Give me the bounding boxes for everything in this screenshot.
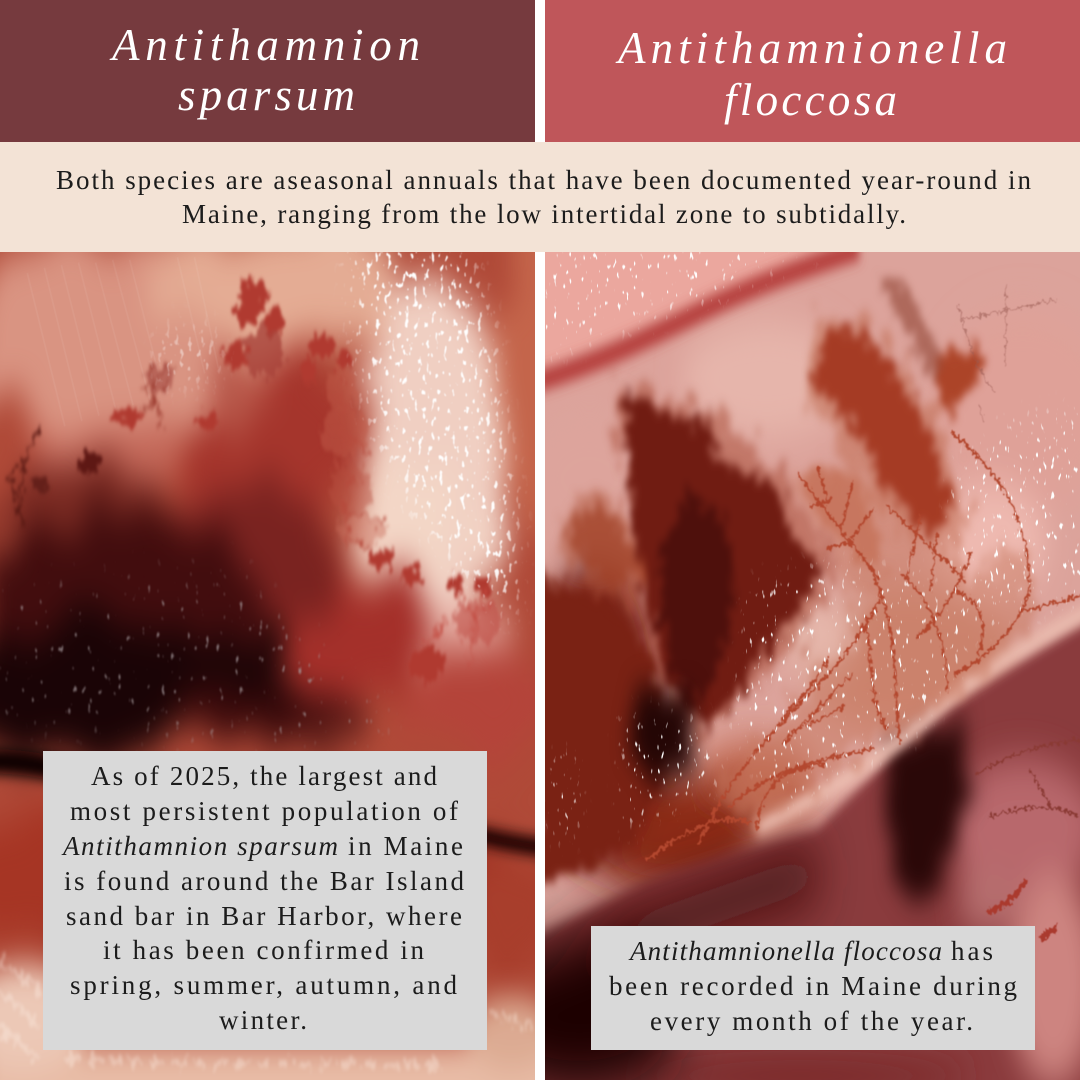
callout text: largest Maine population at Bar Island [61,761,464,1035]
pink fingertip and crease [531,231,866,376]
text: both species are aseasonal annuals: Maine, ranging from the low intertidal zone to subtidally. [182,199,906,229]
seaweed halos [555,321,1033,822]
wet sparkle highlights [535,236,1080,833]
heading: Antithamnion sparsum [109,20,420,120]
text: both species are aseasonal annuals [56,165,1032,229]
panel: left species heading [0,0,535,142]
callout text: largest Maine population at Bar Island: in Maine [348,831,463,861]
callout: left population note [43,751,487,1050]
callout text: recorded every month: every month of the year. [650,1006,973,1036]
panel: right species heading [545,0,1080,142]
callout text: recorded every month [609,936,1017,1036]
sparkling ridge highlights [157,220,515,616]
peach finger at the bottom [0,965,560,1080]
callout text: largest Maine population at Bar Island: sand bar in Bar Harbor, where [66,901,462,931]
callout text: largest Maine population at Bar Island: most persistent population of [70,796,458,826]
lower ridge highlights [0,962,535,1065]
callout text: largest Maine population at Bar Island: Antithamnion sparsum [61,831,338,861]
heading: Antithamnion sparsum: sparsum [178,70,355,120]
water droplets over dark mass [0,569,403,748]
seaweed fronds [535,278,982,886]
callout text: largest Maine population at Bar Island: winter. [219,1005,307,1035]
callout text: recorded every month: Antithamnionella floccosa [628,936,942,966]
dark patch on the lower finger [886,722,968,902]
fingerprint ridges [27,257,218,426]
callout text: recorded every month: been recorded in Maine during [609,971,1017,1001]
heading: Antithamnionella floccosa: Antithamnionella [615,23,1007,73]
heading: Antithamnionella floccosa: floccosa [724,75,897,125]
photo: Antithamnion sparsum on a fingertip [0,252,535,1080]
callout text: largest Maine population at Bar Island: spring, summer, autumn, and [70,970,458,1000]
callout: right year-round note [591,926,1035,1050]
callout text: largest Maine population at Bar Island: it has been confirmed in [103,935,424,965]
skin tones of the middle finger [528,310,1080,891]
heading: Antithamnionella floccosa [615,23,1007,125]
callout text: largest Maine population at Bar Island: is found around the Bar Island [64,866,464,896]
callout text: largest Maine population at Bar Island: As of 2025, the largest and [91,761,438,791]
shadow below the finger edge [477,870,818,1080]
photo: Antithamnionella floccosa on fingers [545,252,1080,1080]
seaweed fronds [33,279,502,681]
callout text: recorded every month: has [951,936,993,966]
lacy branches [647,432,1080,859]
panel: shared intro text band [0,142,1080,252]
heading: Antithamnion sparsum: Antithamnion [109,20,420,70]
text: both species are aseasonal annuals: Both species are aseasonal annuals that have been documented year-round in [56,165,1032,195]
lower finger region [531,611,1080,1080]
bright finger edge above the crease [757,611,1080,828]
soft colour masses [0,194,577,986]
darkest frond base [627,690,695,785]
dark shadow line [0,761,553,849]
